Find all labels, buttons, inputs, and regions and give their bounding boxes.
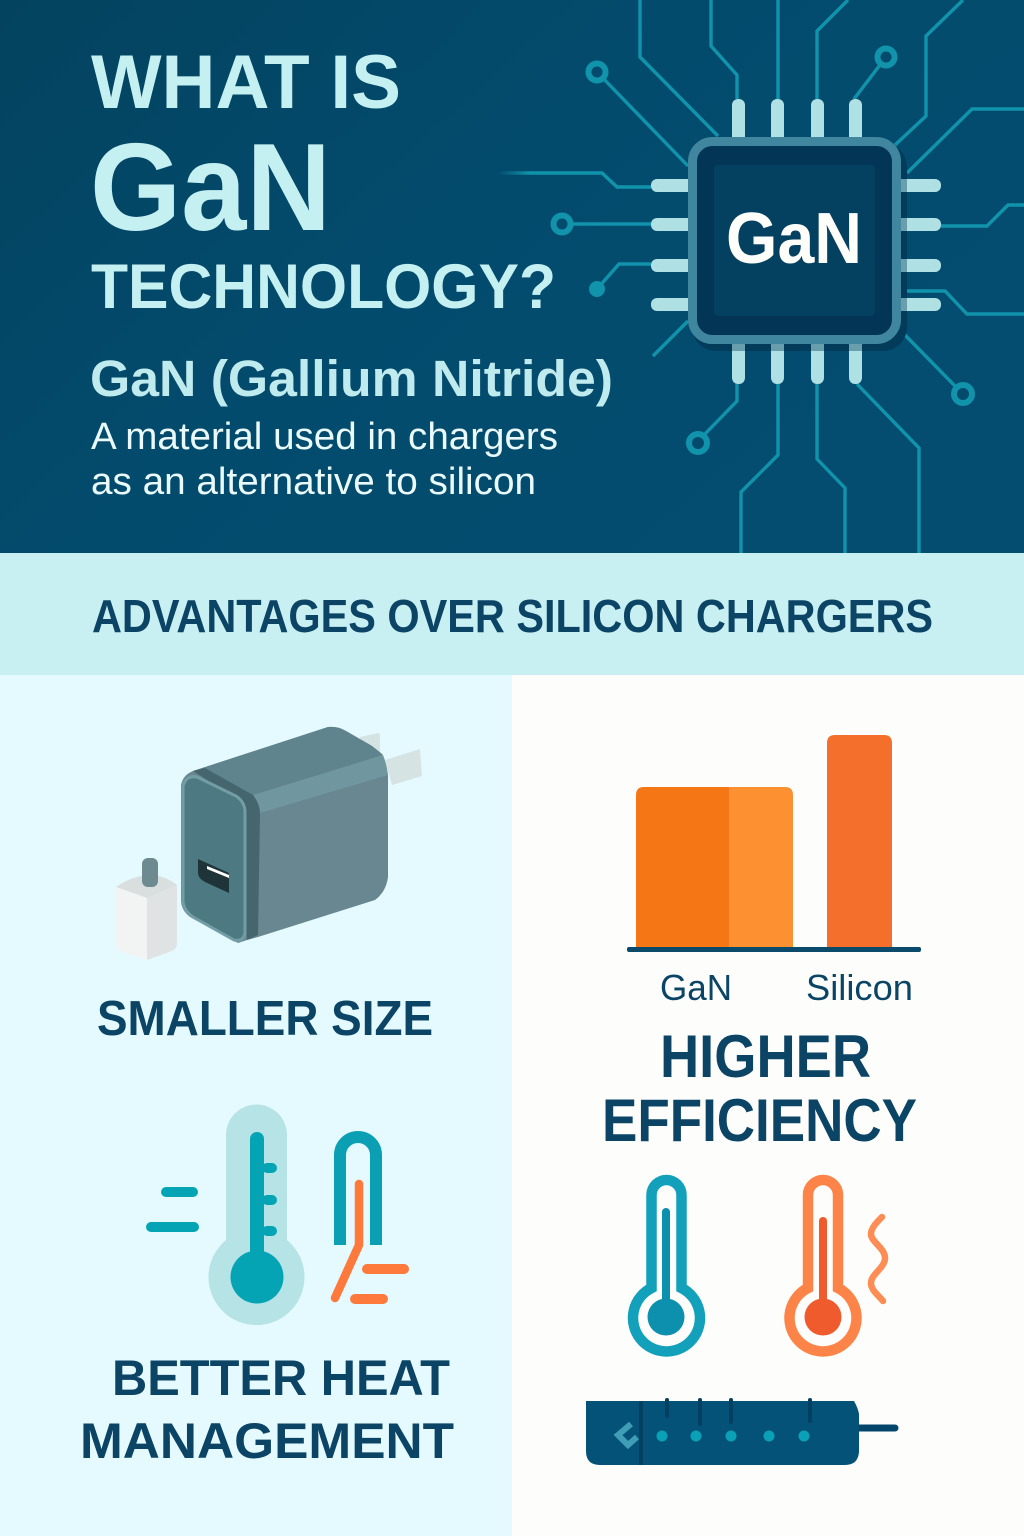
bar chart: GaN vs silicon bbox=[627, 735, 921, 1008]
label: better heat management: BETTER HEAT bbox=[112, 1350, 450, 1406]
description bbox=[91, 416, 558, 503]
icon: cool thermometer bbox=[633, 1180, 700, 1351]
icon: power strip bbox=[586, 1400, 895, 1465]
label: higher efficiency: EFFICIENCY bbox=[602, 1087, 917, 1154]
label: higher efficiency: HIGHER bbox=[660, 1023, 871, 1090]
description: as an alternative to silicon bbox=[91, 461, 536, 503]
icon: hot thermometer bbox=[789, 1180, 885, 1351]
subtitle: GaN (Gallium Nitride) bbox=[90, 350, 613, 407]
circuit traces bbox=[498, 0, 1024, 553]
banner: advantages heading: ADVANTAGES OVER SILICON CHARGERS bbox=[92, 590, 933, 642]
label: better heat management bbox=[80, 1350, 454, 1469]
icon: cooling thermometer bbox=[146, 1104, 409, 1325]
title: TECHNOLOGY? bbox=[91, 252, 556, 322]
bar chart: GaN vs silicon: GaN bbox=[660, 967, 732, 1008]
bar chart: GaN vs silicon: Silicon bbox=[806, 967, 913, 1008]
banner: advantages heading bbox=[0, 553, 1024, 675]
chip bbox=[651, 99, 941, 384]
description: A material used in chargers bbox=[91, 416, 558, 458]
chip label: GaN bbox=[726, 199, 862, 279]
label: higher efficiency bbox=[602, 1023, 917, 1154]
label: better heat management: MANAGEMENT bbox=[80, 1413, 454, 1469]
panel: right column bbox=[512, 675, 1024, 1536]
title bbox=[90, 40, 556, 322]
panel: header bbox=[0, 0, 1024, 553]
title: WHAT IS bbox=[91, 40, 401, 125]
title: GaN bbox=[90, 119, 331, 257]
label: smaller size: SMALLER SIZE bbox=[97, 992, 433, 1046]
panel: left column bbox=[0, 675, 512, 1536]
icon: GaN charger beside small charger bbox=[116, 727, 422, 960]
